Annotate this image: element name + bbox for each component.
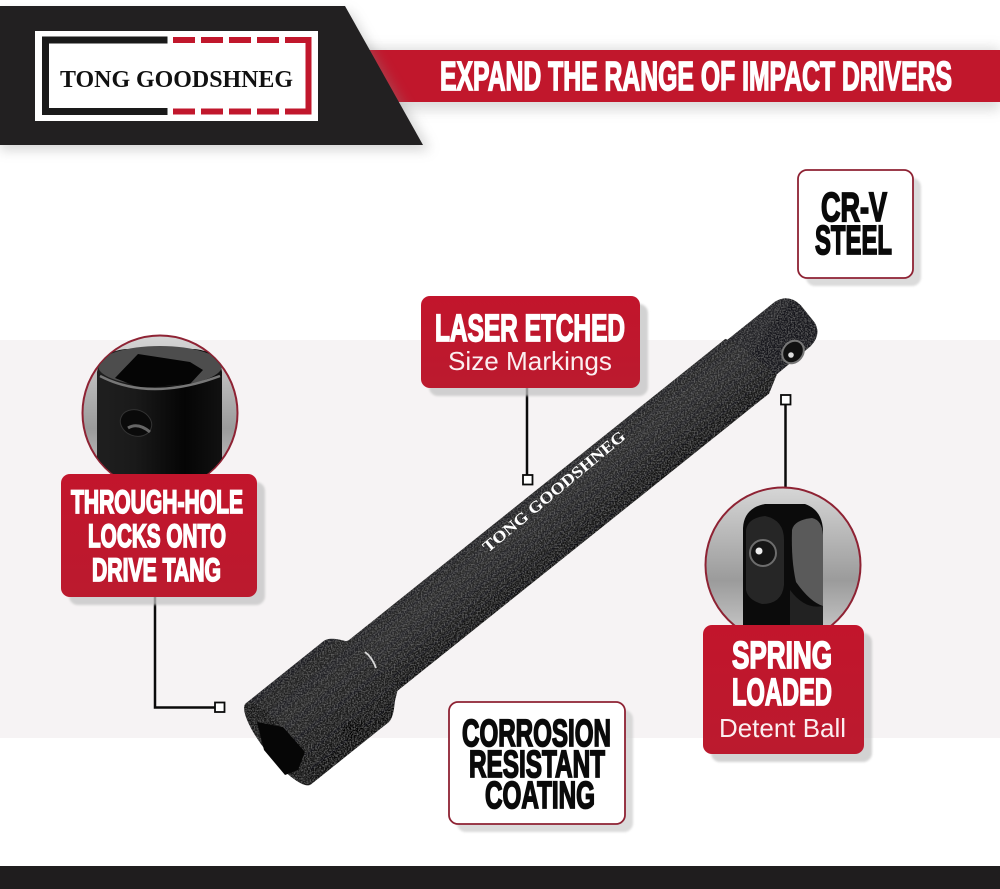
callout: corrosion resistant coating: [449, 702, 633, 832]
callout: through-hole: [61, 474, 265, 605]
callout: spring loaded: LOADED: [732, 672, 832, 714]
callout: CR-V steel: STEEL: [815, 217, 892, 263]
callout: through-hole: DRIVE TANG: [92, 552, 221, 588]
header black tab with logo: [0, 6, 430, 150]
etched brand on shaft: TONG GOODSHNEG: [480, 428, 630, 556]
extension bar: [235, 277, 843, 793]
leader line: laser etched: [523, 388, 532, 484]
callout: spring loaded: Detent Ball: [719, 713, 846, 743]
leader line: through-hole: [155, 597, 224, 712]
callout: through-hole: THROUGH-HOLE: [71, 484, 243, 520]
detail circle: socket through-hole: [82, 334, 238, 474]
detail circle: spring detent ball: [706, 488, 860, 642]
callout: spring loaded: SPRING: [732, 635, 832, 677]
callout: laser etched: Size Markings: [448, 346, 612, 376]
callout: corrosion resistant coating: CORROSION: [462, 713, 611, 755]
callout: CR-V steel: [798, 170, 921, 286]
square drive end: [723, 291, 832, 396]
bottom bar: [0, 866, 1000, 889]
callout: corrosion resistant coating: RESISTANT: [469, 744, 605, 786]
shoulder highlight: [365, 652, 376, 668]
callout: spring loaded: [703, 625, 872, 762]
detent ball hole: [778, 336, 808, 368]
logo wordmark: TONG GOODSHNEG: [60, 67, 293, 93]
leader line: spring loaded: [781, 395, 790, 487]
header ribbon with title: [340, 48, 1000, 110]
callout: CR-V steel: CR-V: [821, 184, 887, 230]
callout: laser etched: [421, 296, 648, 396]
callout: laser etched: LASER ETCHED: [435, 308, 625, 350]
callout: through-hole: LOCKS ONTO: [88, 518, 226, 554]
shaft: [343, 328, 783, 700]
callout: corrosion resistant coating: COATING: [485, 775, 595, 817]
socket: [246, 622, 412, 784]
socket face: [235, 695, 322, 793]
socket hole in side: [338, 716, 368, 745]
socket square opening: [257, 722, 305, 775]
logo: [35, 31, 318, 121]
